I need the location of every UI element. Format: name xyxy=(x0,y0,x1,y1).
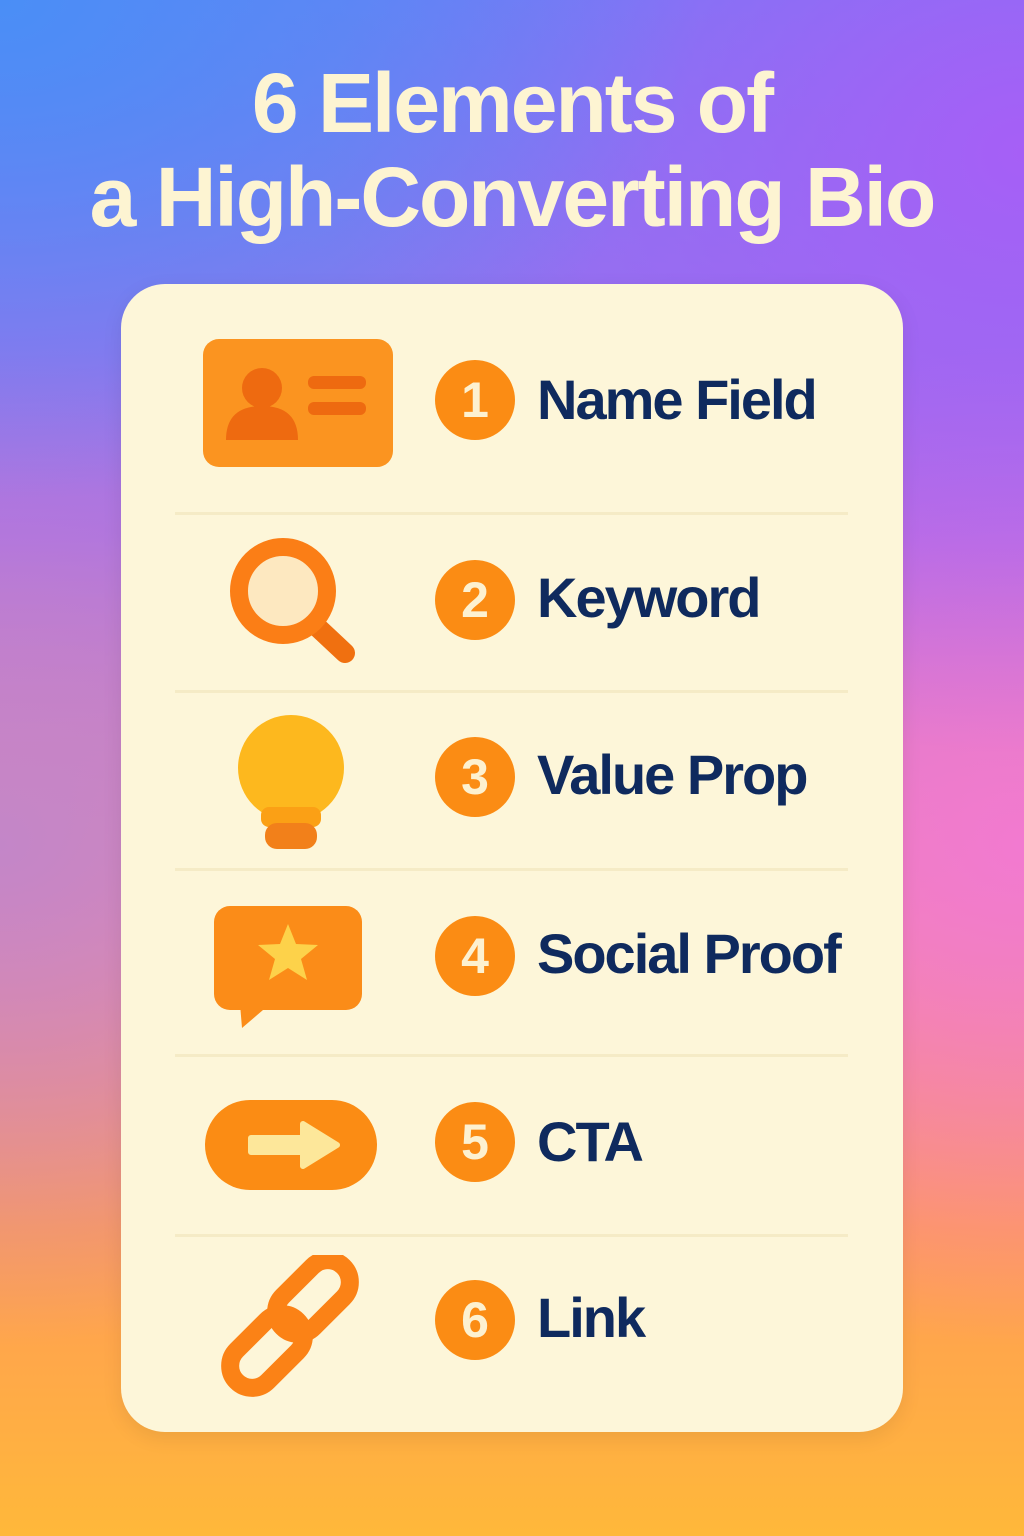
icon: chat star xyxy=(214,906,362,1028)
num 5 xyxy=(435,1102,515,1182)
num 4: 4 xyxy=(461,928,489,984)
panel: card xyxy=(121,284,903,1432)
num 6: 6 xyxy=(461,1292,489,1348)
num 3 xyxy=(435,737,515,817)
label 5: CTA xyxy=(537,1110,642,1173)
icon: magnifier xyxy=(230,538,355,663)
icon: cta button xyxy=(205,1100,377,1190)
icon: id card xyxy=(203,339,393,467)
num 1 xyxy=(435,360,515,440)
num 1: 1 xyxy=(461,372,489,428)
num 4 xyxy=(435,916,515,996)
label 6: Link xyxy=(537,1286,644,1349)
icon: chain link xyxy=(221,1255,359,1397)
num 2: 2 xyxy=(461,572,489,628)
title: a High-Converting Bio xyxy=(90,150,934,244)
num 3: 3 xyxy=(461,749,489,805)
label 2: Keyword xyxy=(537,566,760,629)
title xyxy=(90,56,934,244)
num 5: 5 xyxy=(461,1114,489,1170)
label 1: Name Field xyxy=(537,368,816,431)
label 4: Social Proof xyxy=(537,922,840,985)
icon: bulb xyxy=(238,715,344,849)
num 6 xyxy=(435,1280,515,1360)
title: 6 Elements of xyxy=(252,56,772,150)
num 2 xyxy=(435,560,515,640)
label 3: Value Prop xyxy=(537,743,806,806)
